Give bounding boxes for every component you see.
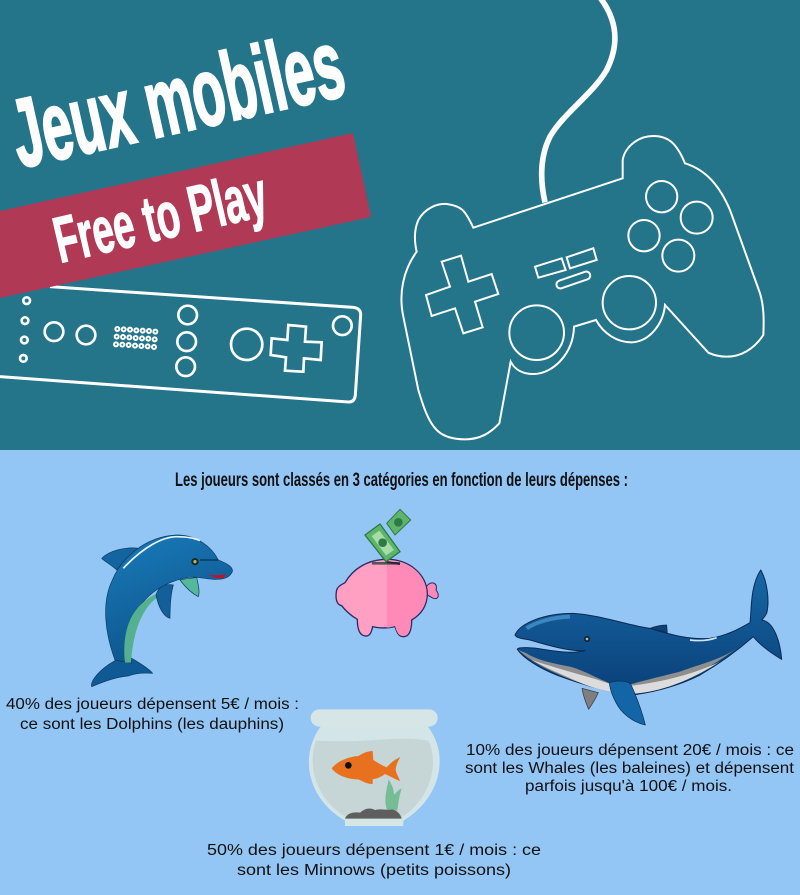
text: whales — [465, 742, 795, 795]
text: minnows — [207, 842, 541, 879]
text: dolphins: ce sont les Dolphins (les dauphins) — [20, 716, 284, 733]
panel: header background — [0, 0, 800, 450]
text: minnows: sont les Minnows (petits poissons) — [237, 862, 511, 879]
text: whales: sont les Whales (les baleines) et dépensent — [465, 760, 795, 777]
icon: gamepad with cable — [401, 0, 764, 439]
text: whales: parfois jusqu'à 100€ / mois. — [525, 778, 732, 795]
text: dolphins: 40% des joueurs dépensent 5€ / mois : — [6, 696, 299, 713]
banner: free to play ribbon — [0, 133, 371, 298]
panel: lower background — [0, 450, 800, 895]
subtitle: Free to Play — [47, 157, 274, 277]
icon: goldfish bowl — [309, 709, 440, 826]
text: minnows: 50% des joueurs dépensent 1€ / mois : ce — [207, 842, 541, 859]
icon: piggy bank with money — [336, 509, 438, 637]
text: whales: 10% des joueurs dépensent 20€ / mois : ce — [466, 742, 794, 759]
icon: dolphin — [91, 535, 232, 687]
icon: wii remote controller — [0, 287, 361, 402]
text: dolphins — [6, 696, 299, 733]
icon: whale — [515, 570, 782, 725]
